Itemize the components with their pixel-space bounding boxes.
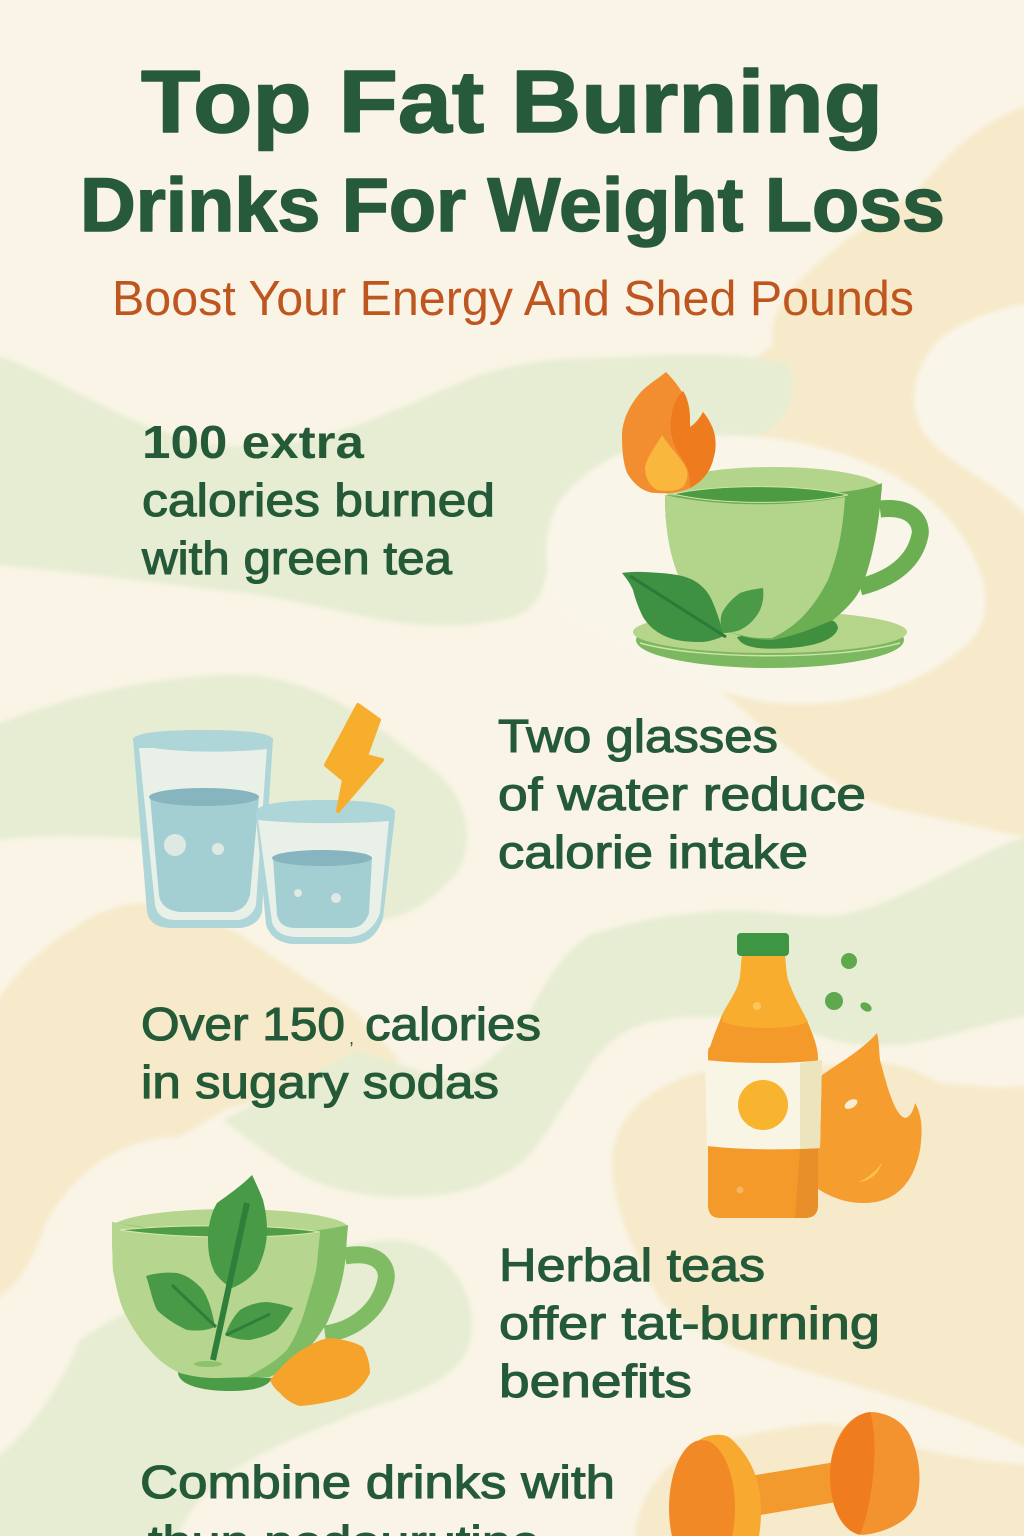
large glass [133, 730, 273, 928]
text block: green tea: with green tea [141, 532, 452, 584]
text block: sugary sodas: in sugary sodas [141, 1056, 499, 1108]
text block: water: Two glasses [498, 710, 778, 762]
title [80, 52, 945, 248]
leaves [622, 572, 763, 642]
lightning bolt [326, 705, 382, 811]
text block: herbal teas [499, 1239, 880, 1407]
text block: green tea: 100 extra [142, 416, 364, 468]
title: Drinks For Weight Loss [80, 163, 945, 248]
bottle label [705, 1060, 822, 1149]
icon: two glasses with lightning bolt [133, 705, 395, 944]
text block: herbal teas: benefits [499, 1355, 692, 1407]
cup [112, 1209, 386, 1391]
bubbles [825, 953, 873, 1013]
left weight [669, 1435, 761, 1536]
title: Top Fat Burning [141, 52, 883, 151]
text block: water: of water reduce [498, 768, 866, 820]
herb sprig [146, 1175, 293, 1367]
text block: water [498, 710, 866, 878]
icon: herbal tea cup with leaves [112, 1175, 386, 1406]
text block: combine drinks [140, 1456, 615, 1536]
text block: green tea: calories burned [142, 474, 495, 526]
flame [622, 372, 716, 493]
bottle cap [737, 933, 789, 956]
text block: herbal teas: Herbal teas [499, 1239, 765, 1291]
saucer [633, 611, 907, 668]
icon: soda bottle with flame [705, 933, 922, 1218]
flame behind bottle [815, 1033, 922, 1203]
text block: sugary sodas: , [349, 1028, 354, 1048]
text block: herbal teas: offer tat-burning [499, 1297, 880, 1349]
text block: sugary sodas [141, 998, 541, 1108]
right weight [830, 1412, 919, 1535]
text block: green tea [141, 416, 495, 584]
subtitle: Boost Your Energy And Shed Pounds [112, 272, 914, 326]
icon: dumbbell [669, 1412, 919, 1536]
ginger [270, 1338, 370, 1406]
icon: green tea cup with flame [622, 372, 920, 668]
text block: combine drinks: Combine drinks with [140, 1456, 615, 1508]
text block: sugary sodas: Over 150 [141, 998, 345, 1050]
text block: sugary sodas: calories [365, 998, 541, 1050]
small glass [256, 800, 395, 944]
cup body [664, 467, 920, 649]
text block: water: calorie intake [498, 826, 808, 878]
bottle body [708, 956, 818, 1218]
handle [750, 1458, 860, 1516]
